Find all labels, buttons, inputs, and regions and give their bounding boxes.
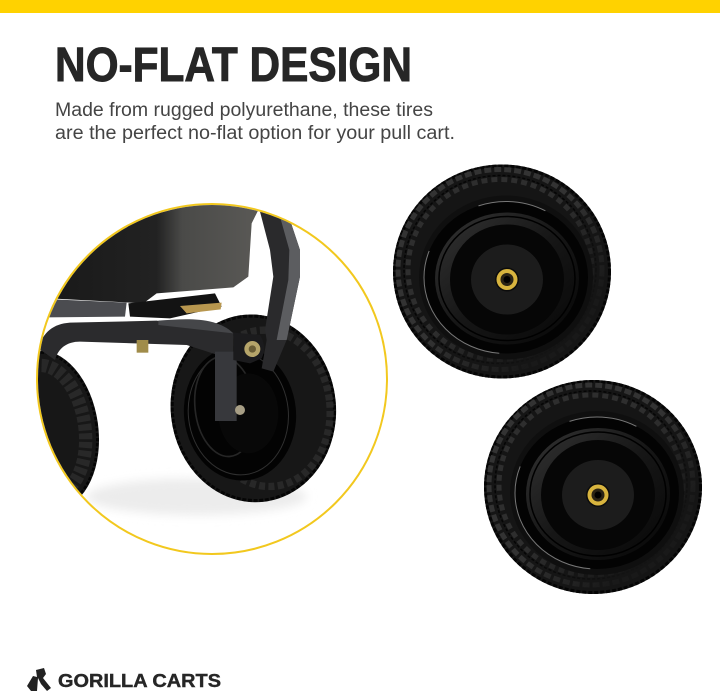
tire product photo: upper [393,164,611,378]
tub lower frame [47,299,127,317]
wordmark: GORILLA CARTS [58,671,221,691]
subtitle: are the perfect no-flat option for your pull cart. [55,123,455,144]
cart frame [38,319,264,421]
tire product photo: lower [484,380,702,594]
top yellow bar [0,0,720,13]
tub bracket [128,293,222,318]
handle arm [260,212,300,372]
title: NO-FLAT DESIGN [55,39,412,92]
floor shadow [87,478,307,515]
front wheel [170,314,336,502]
subtitle: Made from rugged polyurethane, these tires [55,100,433,121]
circular photo inset: cart wheel close-up [0,200,387,554]
logo: gorilla carts [27,668,221,691]
back wheel [38,350,100,495]
subtitle [55,100,455,144]
icon: gorilla [27,668,51,691]
cart tub [58,205,258,303]
